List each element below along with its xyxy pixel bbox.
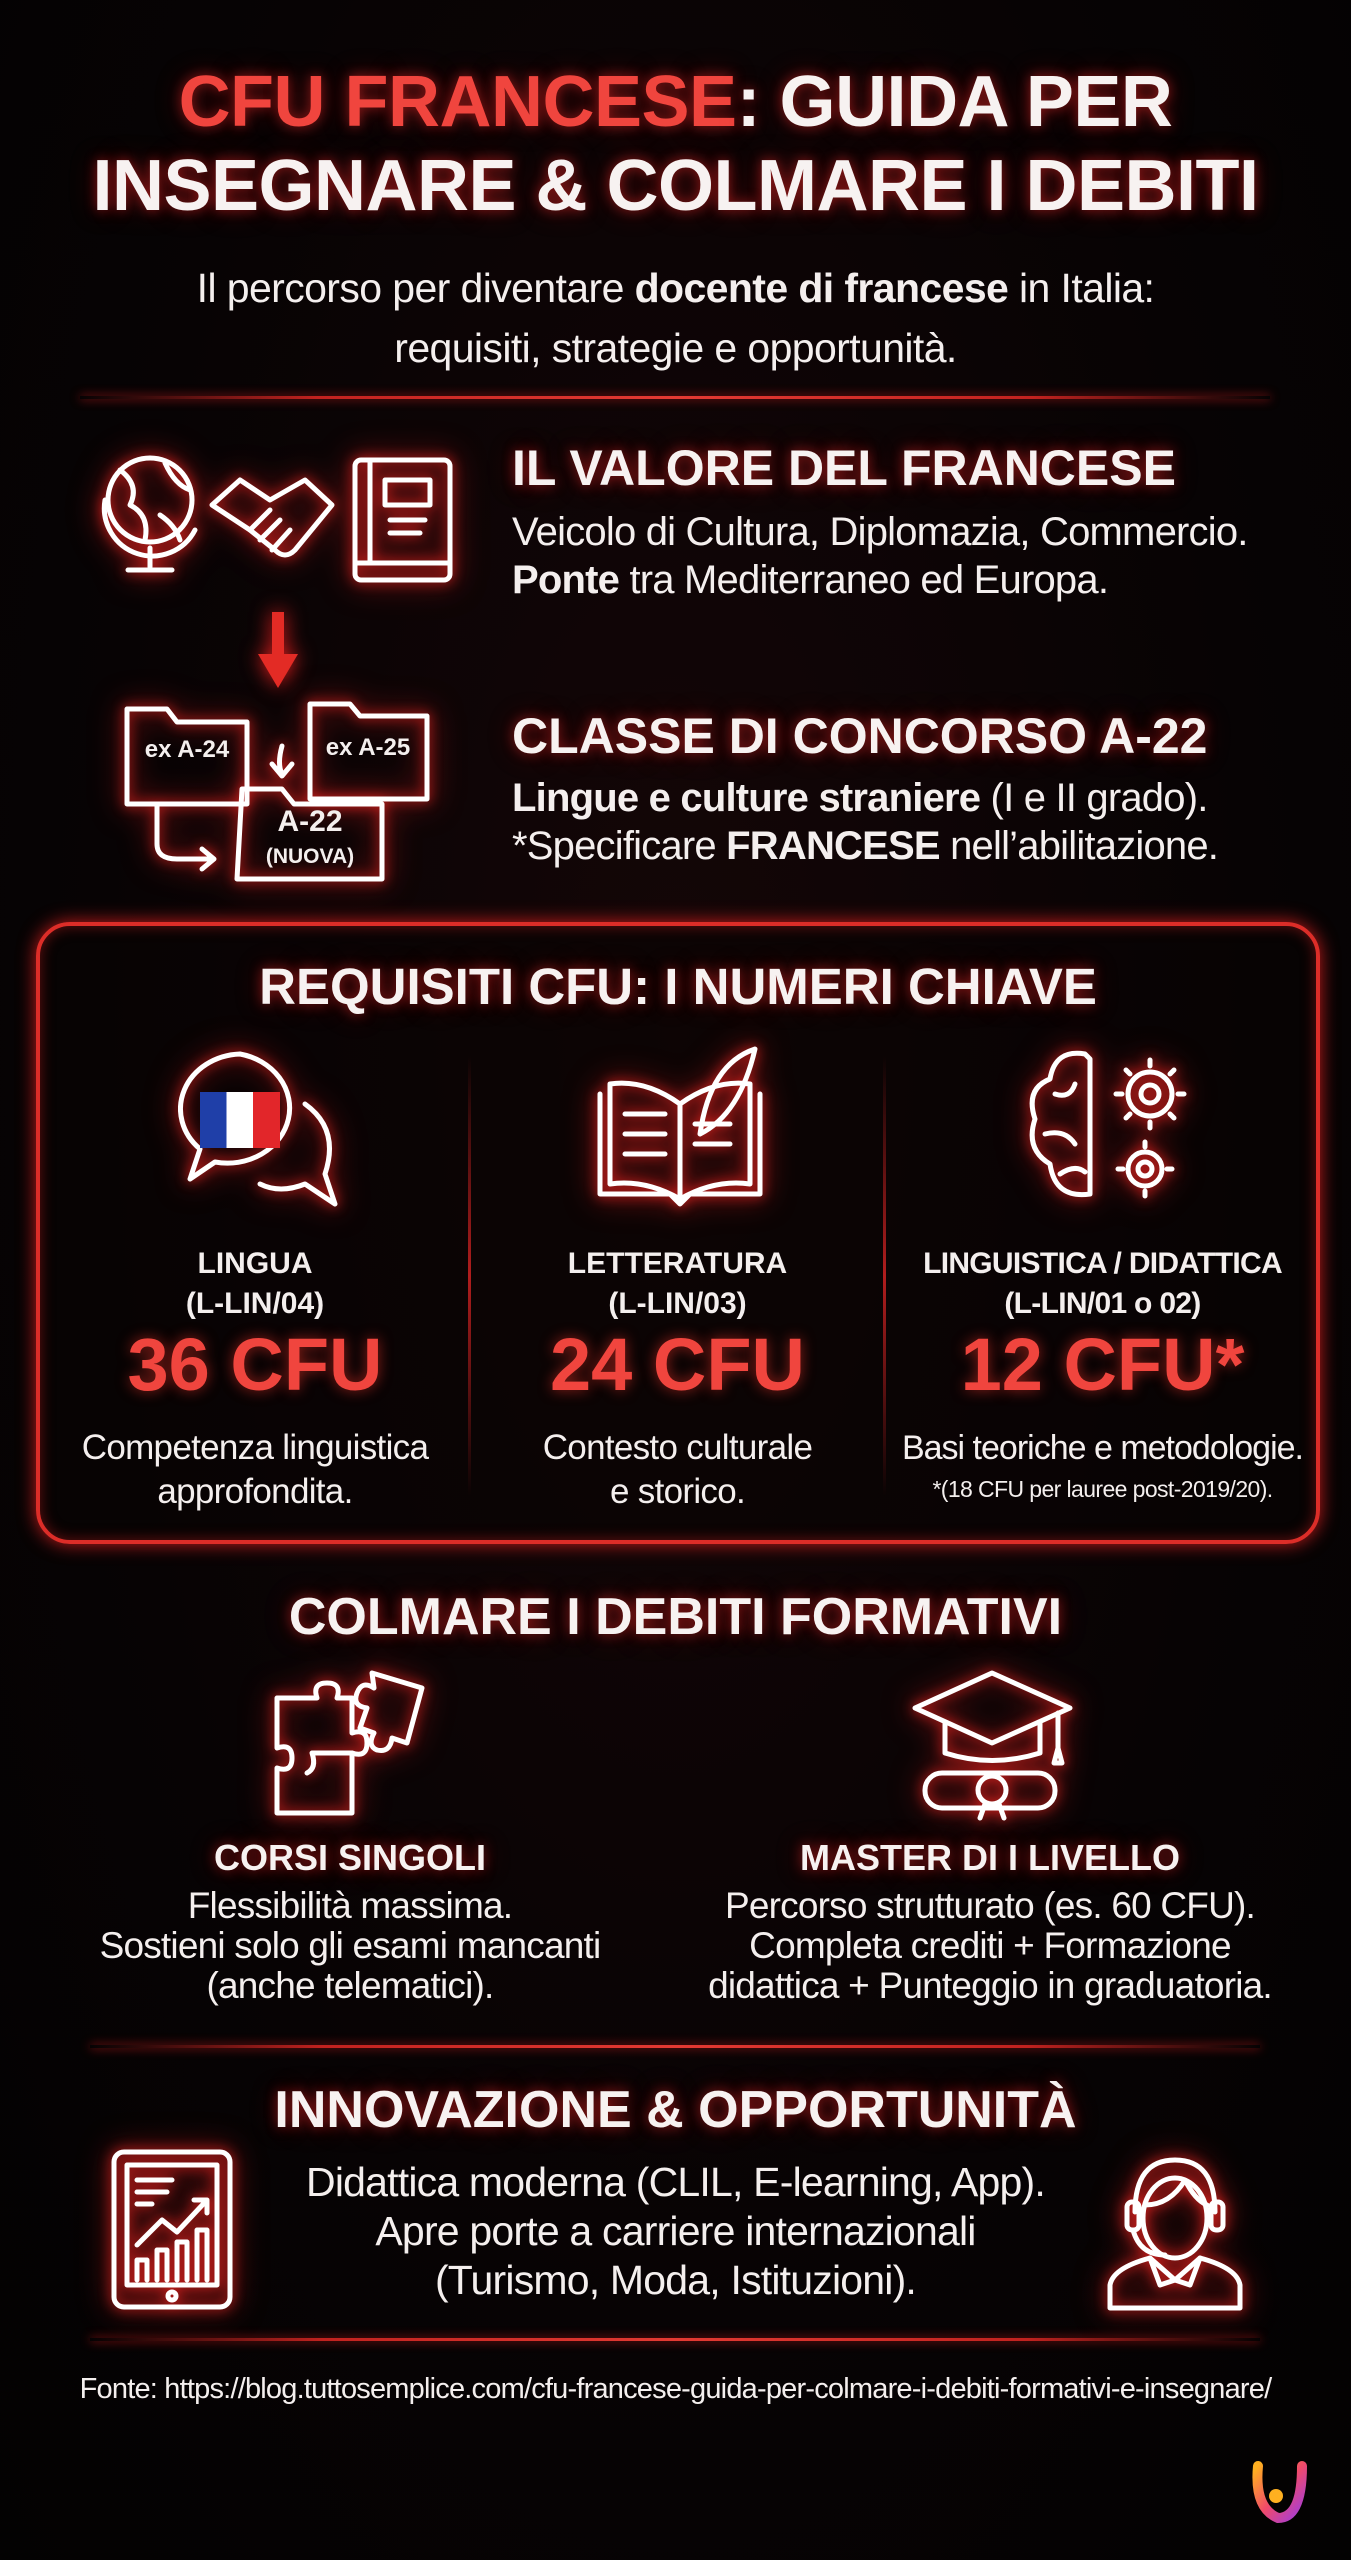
text: master: didattica + Punteggio in graduatoria. [708,1965,1272,2006]
panel: requisiti CFU: Contesto culturale [543,1428,812,1467]
subtitle: requisiti, strategie e opportunità. [394,325,957,371]
icon: globe, handshake, book [82,437,473,603]
heading: classe di concorso: CLASSE DI CONCORSO A-22 [512,708,1207,764]
icon: puzzle [254,1654,440,1836]
icon: graduation cap and diploma [901,1654,1086,1836]
panel: requisiti CFU: (L-LIN/04) [186,1287,324,1320]
text: innovazione [306,2159,1045,2303]
panel: requisiti CFU [36,922,1320,1544]
heading: requisiti: REQUISITI CFU: I NUMERI CHIAVE [259,958,1097,1015]
title [85,62,1266,226]
subtitle [197,265,1154,371]
text: corsi singoli [100,1835,600,2006]
icon: person with headset [1089,2139,1261,2330]
text: master: MASTER DI I LIVELLO [800,1837,1180,1878]
panel: requisiti CFU: (L-LIN/01 o 02) [1004,1287,1201,1320]
heading: colmare: COLMARE I DEBITI FORMATIVI [289,1588,1062,1646]
panel: requisiti CFU: e storico. [610,1472,745,1511]
column: letteratura [543,1032,812,1511]
title: INSEGNARE & COLMARE I DEBITI [92,146,1259,226]
icon: speech bubbles with french flag [160,1034,353,1220]
icon: folders A-22: (NUOVA) [266,845,354,868]
panel: requisiti CFU: LETTERATURA [568,1247,787,1280]
text: corsi singoli: CORSI SINGOLI [214,1837,486,1878]
icon: tablet with chart [91,2129,253,2330]
heading: innovazione: INNOVAZIONE & OPPORTUNITÀ [274,2081,1077,2139]
column: lingua [82,1034,429,1511]
text: corsi singoli: Sostieni solo gli esami mancanti [100,1925,600,1966]
icon: folders A-22 [104,682,450,902]
panel: requisiti CFU: 24 CFU [550,1323,805,1406]
text: classe: *Specificare FRANCESE nell’abilitazione. [512,824,1218,868]
text: classe: Lingue e culture straniere (I e II grado). [512,776,1208,820]
panel: requisiti CFU: *(18 CFU per lauree post-2019/20). [932,1476,1273,1502]
icon: book and quill [576,1032,784,1223]
icon: folders A-22: ex A-24 [145,736,229,763]
subtitle: Il percorso per diventare docente di francese in Italia: [197,265,1154,311]
panel: requisiti CFU: LINGUA [198,1247,312,1280]
heading: il valore: IL VALORE DEL FRANCESE [512,440,1176,496]
arrow: down [248,599,308,697]
panel: requisiti CFU: Competenza linguistica [82,1428,428,1467]
text: innovazione: Apre porte a carriere internazionali [375,2208,976,2254]
text: il valore [512,510,1248,602]
logo [1252,2461,1307,2523]
text: master: Completa crediti + Formazione [749,1925,1231,1966]
icon: folders A-22: ex A-25 [326,734,410,761]
panel: requisiti CFU: approfondita. [157,1472,353,1511]
text: il valore: Veicolo di Cultura, Diplomazia, Commercio. [512,510,1248,554]
text: master: Percorso strutturato (es. 60 CFU). [725,1885,1255,1926]
panel: requisiti CFU: 36 CFU [128,1323,382,1406]
column: linguistica [902,1034,1303,1502]
panel: requisiti CFU: Basi teoriche e metodologie. [902,1429,1303,1467]
text: corsi singoli: Flessibilità massima. [188,1885,512,1926]
title: CFU FRANCESE: GUIDA PER [179,62,1172,142]
panel: requisiti CFU: LINGUISTICA / DIDATTICA [923,1247,1282,1280]
text: corsi singoli: (anche telematici). [206,1965,494,2006]
text: il valore: Ponte tra Mediterraneo ed Europa. [512,558,1108,602]
panel: requisiti CFU: 12 CFU* [961,1323,1244,1406]
icon: folders A-22: A-22 [277,805,343,838]
text: innovazione: (Turismo, Moda, Istituzioni). [435,2257,916,2303]
text: classe [512,776,1218,868]
icon: brain and gears [1010,1034,1198,1214]
text: innovazione: Didattica moderna (CLIL, E-learning, App). [306,2159,1045,2205]
panel: requisiti CFU: (L-LIN/03) [608,1287,747,1320]
text: master [708,1835,1272,2006]
source: Fonte: https://blog.tuttosemplice.com/cfu-francese-guida-per-colmare-i-debiti-formativi-e-insegnare/ [80,2373,1271,2405]
